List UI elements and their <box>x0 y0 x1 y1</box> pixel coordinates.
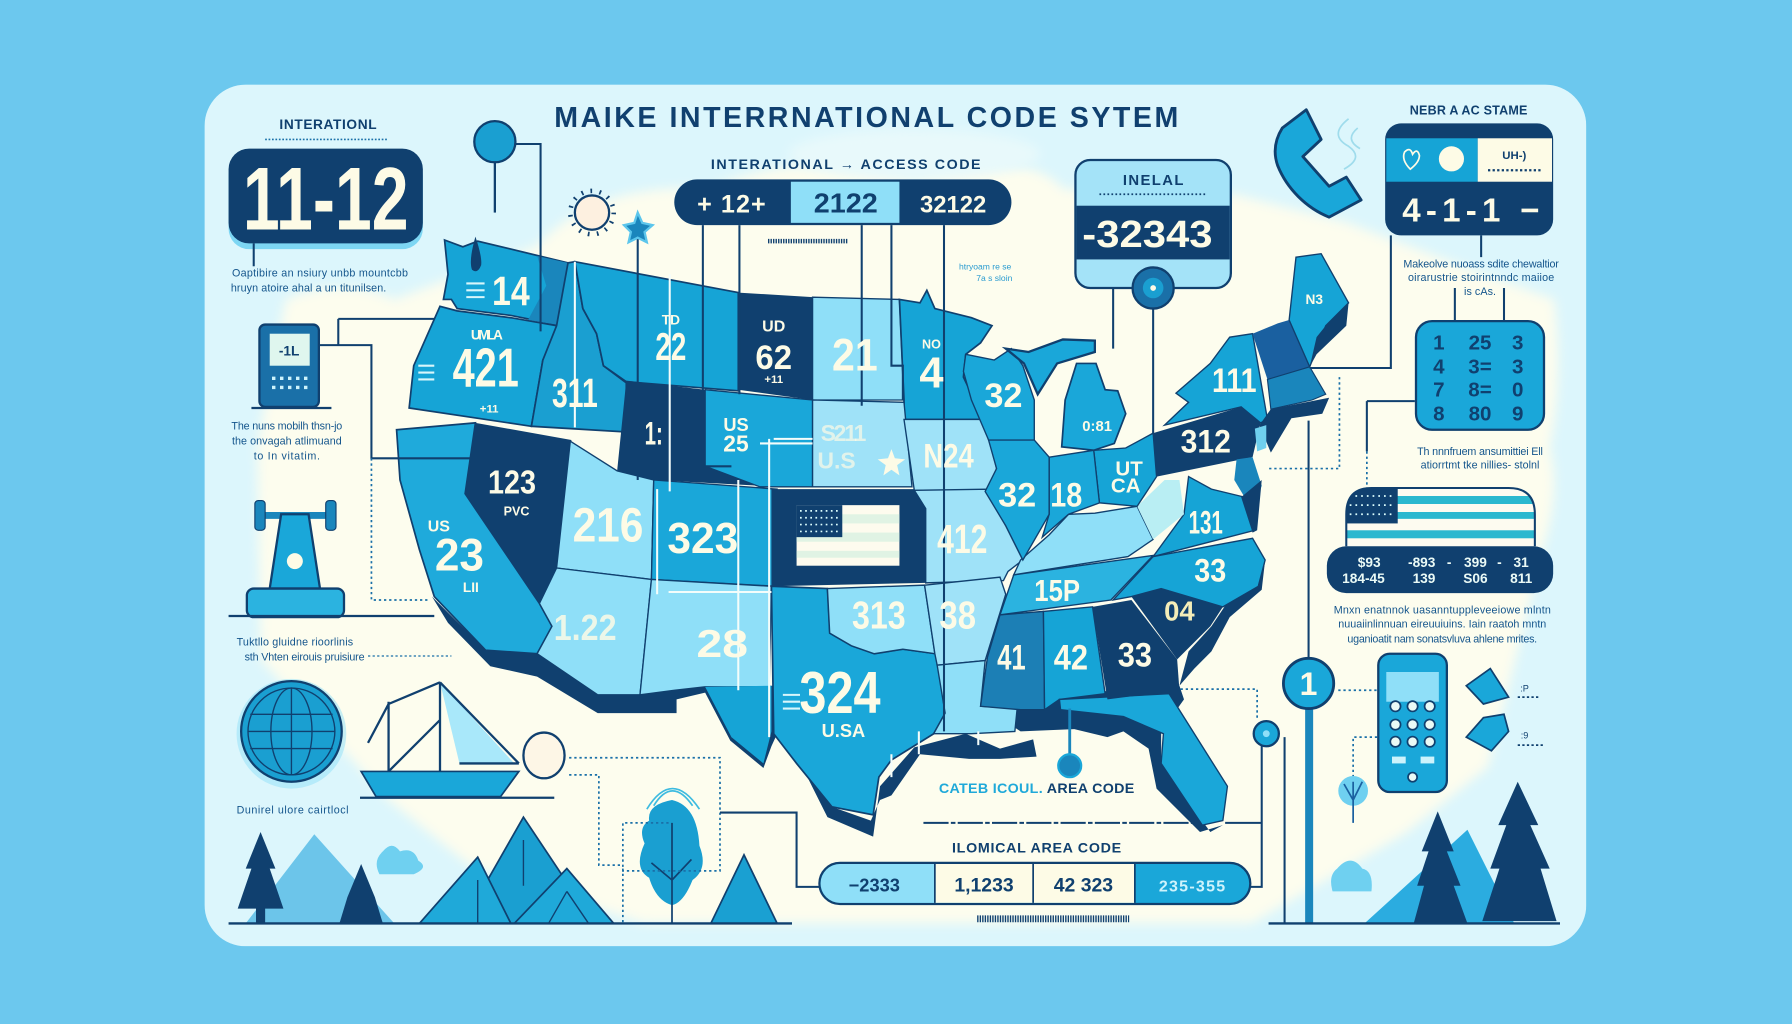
number pill: 399 <box>1464 555 1487 570</box>
access code pill <box>674 179 1011 225</box>
panel: keypad numbers <box>1416 321 1544 430</box>
state: Delaware and Maryland <box>1234 457 1262 503</box>
state number labels: 23 <box>435 529 484 580</box>
state number labels: 412 <box>937 516 987 562</box>
state: New York <box>1165 334 1267 425</box>
state number labels: 38 <box>939 595 976 638</box>
icon: balloon pin <box>474 121 515 213</box>
state number labels: 131 <box>1189 505 1223 541</box>
panel: keypad numbers: 9 <box>1512 403 1523 426</box>
small pin and connector <box>1225 721 1285 923</box>
left caption one: hruyn atoire ahal a un titunilsen. <box>231 282 386 294</box>
state number labels <box>418 268 1323 741</box>
state: Montana <box>575 262 738 391</box>
left caption two: to In vitatim. <box>254 450 320 462</box>
left caption four: Dunirel ulore cairtlocl <box>237 805 349 817</box>
state number labels: 311 <box>552 370 598 416</box>
icon: blue star <box>624 213 653 242</box>
right caption one: Makeolve nuoass sdite chewaltior <box>1403 258 1559 270</box>
state number labels: 41 <box>997 638 1026 678</box>
state number labels: TD <box>662 313 680 328</box>
state number labels: UD <box>762 318 785 335</box>
number marks <box>418 283 800 709</box>
state number labels: PVC <box>504 504 529 518</box>
left caption three: sth Vhten eirouis pruisiure <box>245 652 365 664</box>
state: Illinois <box>985 440 1049 560</box>
panel: keypad numbers: 3= <box>1468 356 1492 379</box>
right caption one <box>1403 258 1559 298</box>
state number labels: UMLA <box>471 327 503 342</box>
title: MAIKE INTERRNATIONAL CODE SYTEM <box>554 102 1178 134</box>
state number labels: 32 <box>984 377 1022 415</box>
state number labels: N3 <box>1306 292 1323 307</box>
panel: 4-1-1 code: 4-1-1 − <box>1402 193 1539 230</box>
panel: keypad numbers: 80 <box>1469 403 1491 426</box>
access code pill: + 12+ <box>697 191 766 219</box>
state number labels: 33 <box>1118 636 1152 674</box>
state: Kansas dark <box>771 489 926 586</box>
left caption three <box>237 637 451 664</box>
panel: keypad numbers: 25 <box>1469 332 1491 355</box>
left caption two: The nuns mobilh thsn-jo <box>231 421 342 433</box>
state number labels: U.SA <box>822 720 865 741</box>
state number labels: 04 <box>1164 596 1195 627</box>
state: Minnesota <box>899 290 992 419</box>
barcode under access pill <box>768 239 848 243</box>
icon: sailing boat <box>360 682 565 798</box>
right caption three <box>1334 605 1551 645</box>
panel: keypad numbers: 3 <box>1512 332 1523 355</box>
panel: keypad numbers: 8 <box>1433 403 1445 426</box>
state: Michigan upper <box>1006 339 1095 394</box>
state: Tennessee <box>1000 555 1153 615</box>
number pill: - <box>1497 555 1502 570</box>
state number labels: +11 <box>480 404 499 416</box>
state: Kentucky <box>1014 506 1153 575</box>
icon: telephone handset <box>1275 110 1361 217</box>
state: Washington <box>443 240 568 325</box>
left code box: 11-12 <box>243 149 409 249</box>
state: Mississippi <box>981 611 1045 710</box>
panel: inelal code: INELAL <box>1123 173 1183 189</box>
access code heading: INTERATIONAL → ACCESS CODE <box>711 157 981 173</box>
icon: smartphone <box>1378 654 1447 792</box>
left caption one: Oaptibire an nsiury unbb mountcbb <box>232 268 408 280</box>
state: Vermont and New Hampshire <box>1253 320 1310 379</box>
state: Utah <box>557 441 654 579</box>
right caption two <box>1417 446 1543 472</box>
left caption two: the onvagah atlimuand <box>232 436 342 448</box>
state number labels: S211 <box>821 420 867 446</box>
state: North Carolina <box>1113 538 1265 607</box>
state: Washington east wedge <box>528 256 568 325</box>
left caption one <box>231 268 408 294</box>
segmented area code pill: 235-355 <box>1159 878 1225 895</box>
number pill: 31 <box>1514 555 1529 570</box>
state: Nebraska west <box>705 390 813 487</box>
state number labels: 15P <box>1034 573 1080 608</box>
number pill: 139 <box>1413 571 1436 586</box>
number pill: 811 <box>1510 571 1533 586</box>
number pill: - <box>1408 555 1413 570</box>
state number labels: 42 <box>1054 638 1088 678</box>
state: Maine <box>1289 254 1349 367</box>
connector lines over map <box>320 144 1504 777</box>
state: Nebraska east <box>813 400 912 487</box>
state number labels: 22 <box>655 326 686 369</box>
state: Colorado <box>651 480 777 586</box>
state number labels: 324 <box>799 659 881 726</box>
barcode under area code pill <box>977 916 1129 922</box>
right flag <box>1346 488 1535 546</box>
side labels: :P <box>1520 683 1529 693</box>
panel: keypad numbers: 7 <box>1433 379 1445 402</box>
state: South Carolina dark <box>1131 589 1223 659</box>
state: New Jersey <box>1255 425 1266 451</box>
right caption two: atiorrtmt tke nillies- stolnl <box>1421 460 1539 472</box>
panel: keypad numbers: 0 <box>1512 379 1523 402</box>
state number labels: CA <box>1111 475 1141 498</box>
state number labels: 28 <box>697 623 748 666</box>
state: West Virginia <box>1137 480 1184 539</box>
panel background <box>205 85 1586 946</box>
state number labels: 312 <box>1181 424 1231 460</box>
state number labels: 313 <box>852 595 906 638</box>
panel: keypad numbers: 4 <box>1433 356 1445 379</box>
state: Arkansas <box>925 577 1006 665</box>
right dotted connectors <box>1181 689 1377 777</box>
state number labels: 25 <box>723 430 749 456</box>
iconomical heading: ILOMICAL AREA CODE <box>952 841 1121 857</box>
state number labels: LII <box>463 580 479 595</box>
state number labels: 4 <box>919 349 943 397</box>
dashed rule <box>923 822 1194 824</box>
map of the United States <box>397 237 1349 837</box>
star on map <box>878 449 905 475</box>
map flag <box>797 505 899 566</box>
right caption two: Th nnnfruem ansumittiei Ell <box>1417 446 1543 458</box>
pin with number 1 <box>1283 658 1334 923</box>
state: Virginia <box>1153 477 1255 557</box>
landscape: trees and mountains right <box>1269 782 1560 923</box>
segmented area code pill: 1,1233 <box>954 874 1014 896</box>
state: Maine coast shadow <box>1310 303 1349 367</box>
segmented area code pill: 42 323 <box>1054 874 1113 896</box>
state number labels: 14 <box>492 268 530 314</box>
icon: mobile device: -1L <box>279 343 299 358</box>
left caption two <box>231 421 342 462</box>
icon: handset fragments <box>1466 669 1509 751</box>
state: Florida <box>1059 694 1227 825</box>
state: Idaho <box>531 262 626 432</box>
state: Missouri <box>914 489 1023 583</box>
left caption three: Tuktllo gluidne rioorlinis <box>237 637 353 649</box>
state: North Dakota dark <box>738 293 813 400</box>
number pill: $93 <box>1358 555 1381 570</box>
dotted connectors lower left <box>569 758 720 923</box>
icon: blue tree with signal <box>640 789 703 923</box>
number pill: - <box>1447 555 1452 570</box>
panel: keypad numbers: 3 <box>1512 356 1523 379</box>
state number labels: 123 <box>488 465 536 502</box>
state number labels: 1: <box>645 416 663 452</box>
area code pin <box>1058 709 1081 777</box>
state: Iowa <box>904 419 997 491</box>
right caption three: nuuaiinlinnuan eireuuiuins. Iain raatoh mntn <box>1338 618 1546 630</box>
state number labels: 421 <box>453 336 519 398</box>
state number labels: 62 <box>755 339 792 377</box>
small note: htryoam re se <box>959 262 1012 272</box>
state: Michigan lower <box>1062 363 1126 450</box>
icon: small plant <box>1338 776 1368 823</box>
state: Nevada dark <box>465 423 571 603</box>
icon: old telephone <box>229 501 434 617</box>
state number labels: US <box>428 518 450 535</box>
state number labels: +11 <box>764 374 784 386</box>
right caption one: oirarustrie stoirintnndc maiioe <box>1408 272 1554 284</box>
panel: keypad numbers: 8= <box>1468 379 1492 402</box>
state number labels: 33 <box>1194 553 1226 589</box>
segmented area code pill <box>819 863 1250 904</box>
segmented area code pill: −2333 <box>849 874 900 895</box>
panel: inelal code <box>1075 160 1231 309</box>
number pill: 893 <box>1413 555 1436 570</box>
state: west Texas <box>705 686 771 763</box>
icon: mobile device <box>251 325 331 408</box>
small note: 7a s sloin <box>976 273 1013 283</box>
state: South Dakota light <box>813 297 904 400</box>
state: Alabama <box>1043 607 1105 710</box>
right caption three: uganioatit nam sonatsvluva ahlene mrites. <box>1347 633 1537 645</box>
state: Ohio <box>1094 433 1157 506</box>
state: Oklahoma <box>827 585 935 654</box>
right heading: NEBR A AC STAME <box>1410 103 1527 117</box>
side labels: :9 <box>1521 730 1528 740</box>
state: Indiana <box>1042 450 1099 537</box>
state: Long Island and New Jersey <box>1259 398 1329 453</box>
pin with number 1: 1 <box>1300 666 1317 702</box>
state: New Mexico <box>640 579 771 695</box>
right caption three: Mnxn enatnnok uasanntuppleveeiowe mlntn <box>1334 605 1551 617</box>
area code label: CATEB ICOUL. AREA CODE <box>939 781 1134 797</box>
pin: Washington drop <box>471 237 481 271</box>
state number labels: US <box>723 414 749 435</box>
access code pill: 2122 <box>814 188 878 219</box>
state: Arizona <box>537 568 651 695</box>
small coast mark <box>1241 480 1262 533</box>
state number labels: U.S <box>818 448 856 474</box>
state number labels: 18 <box>1050 476 1082 514</box>
state: Oregon <box>409 306 557 426</box>
landscape: trees and mountains left <box>229 817 792 923</box>
state number labels: 111 <box>1212 362 1257 400</box>
state number labels: NO <box>922 338 941 352</box>
state number labels: 0:81 <box>1082 419 1112 435</box>
icon: globe <box>237 679 346 789</box>
state: Wisconsin <box>963 349 1034 440</box>
state: Wyoming dark <box>617 381 760 486</box>
state: Louisiana <box>934 661 1017 734</box>
right caption one: is cAs. <box>1464 286 1496 298</box>
small note <box>959 262 1013 283</box>
number pill <box>1327 546 1553 593</box>
panel: 4-1-1 code <box>1385 123 1553 235</box>
connector to area code pill <box>720 813 819 887</box>
coast shadow <box>432 560 1265 837</box>
infographic canvas <box>204 84 1586 946</box>
state number labels: UT <box>1115 457 1143 480</box>
number pill: 184-45 <box>1342 571 1385 586</box>
state: Georgia dark <box>1093 600 1179 699</box>
state number labels: 1.22 <box>554 607 617 648</box>
state: Massachusetts group <box>1267 367 1326 409</box>
panel: keypad numbers: 1 <box>1433 332 1445 355</box>
state number labels: 32 <box>998 476 1036 514</box>
state number labels: 323 <box>667 515 738 563</box>
number pill: S06 <box>1463 571 1488 586</box>
state: Pennsylvania dark <box>1153 407 1261 477</box>
panel: 4-1-1 code: UH-) <box>1502 150 1527 162</box>
state: Texas <box>771 586 945 815</box>
panel: inelal code: -32343 <box>1082 213 1213 255</box>
side labels <box>1518 683 1545 745</box>
state number labels: 21 <box>832 329 878 380</box>
state number labels: N24 <box>923 437 974 475</box>
left heading: INTERATIONL <box>279 117 377 132</box>
access code pill: 32122 <box>920 192 986 219</box>
icon: sun <box>570 191 614 234</box>
state number labels: 216 <box>573 500 643 553</box>
state: California <box>397 423 552 654</box>
